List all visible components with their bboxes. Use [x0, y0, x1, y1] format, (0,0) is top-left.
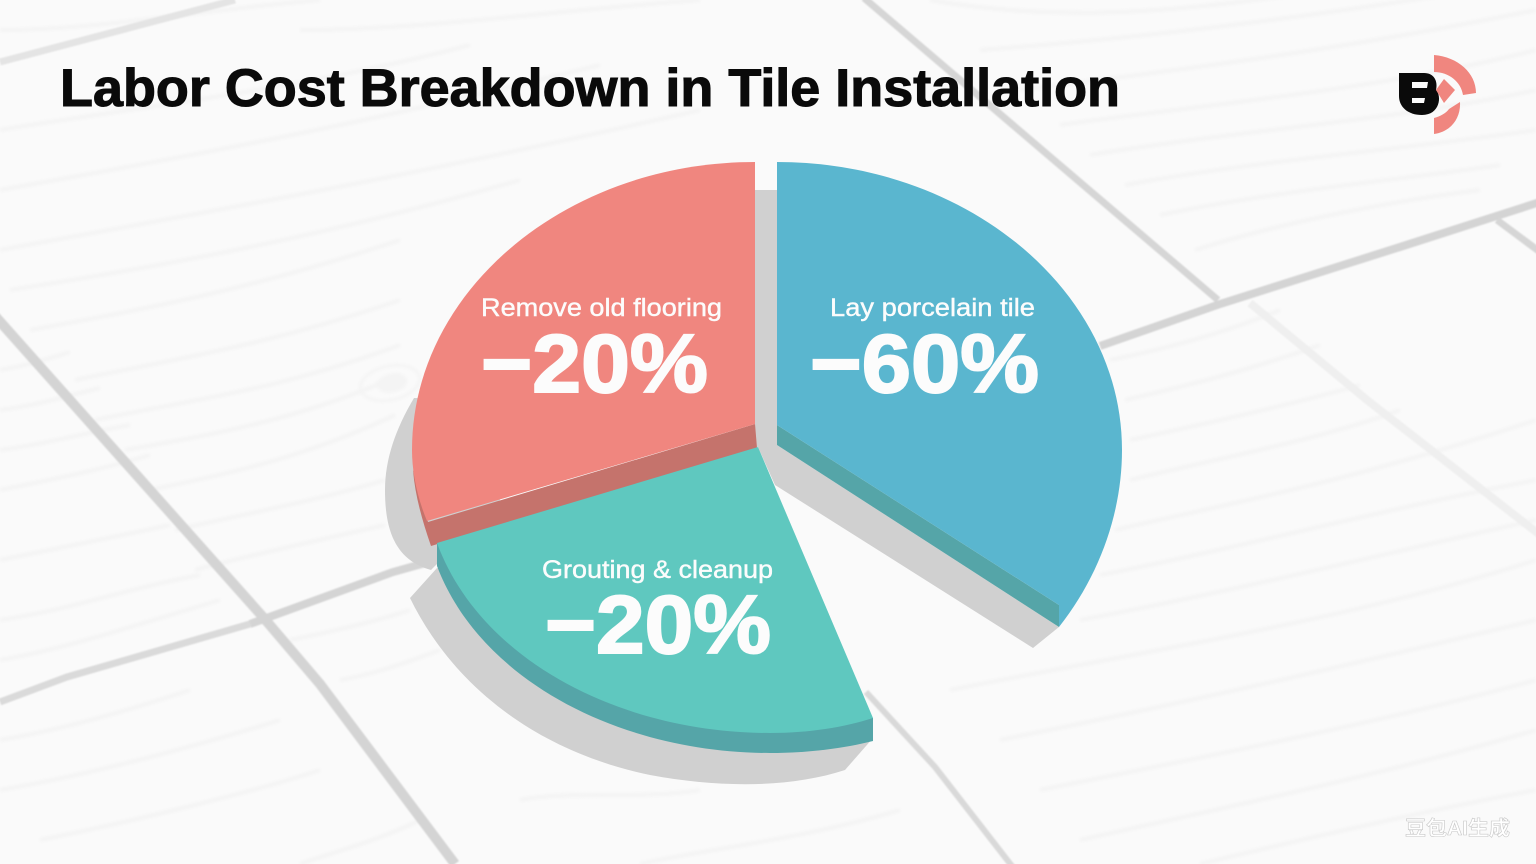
wood knot — [357, 360, 423, 406]
teal value: −20% — [545, 578, 771, 671]
red side wall — [413, 424, 757, 546]
slice: lay porcelain tile — [777, 162, 1122, 627]
title: Labor Cost Breakdown in Tile Installation — [60, 59, 1120, 118]
drop shadows — [385, 190, 1059, 784]
blue top — [777, 162, 1122, 627]
blue value: −60% — [810, 317, 1039, 410]
blue side wall — [777, 425, 1059, 627]
logo: letter B — [1399, 73, 1439, 115]
teal side wall — [437, 543, 873, 753]
red label: Remove old flooring — [481, 294, 722, 322]
slice: grouting and cleanup — [437, 447, 873, 753]
teal top — [437, 447, 873, 733]
watermark: 豆包AI生成 — [1405, 816, 1510, 840]
slice: remove old flooring — [412, 162, 757, 546]
pie chart — [385, 162, 1122, 784]
red value: −20% — [481, 317, 708, 410]
logo — [1399, 55, 1476, 134]
logo: coral arcs — [1434, 55, 1476, 134]
blue label: Lay porcelain tile — [830, 294, 1035, 322]
teal label: Grouting & cleanup — [542, 556, 773, 584]
red top — [412, 162, 755, 521]
